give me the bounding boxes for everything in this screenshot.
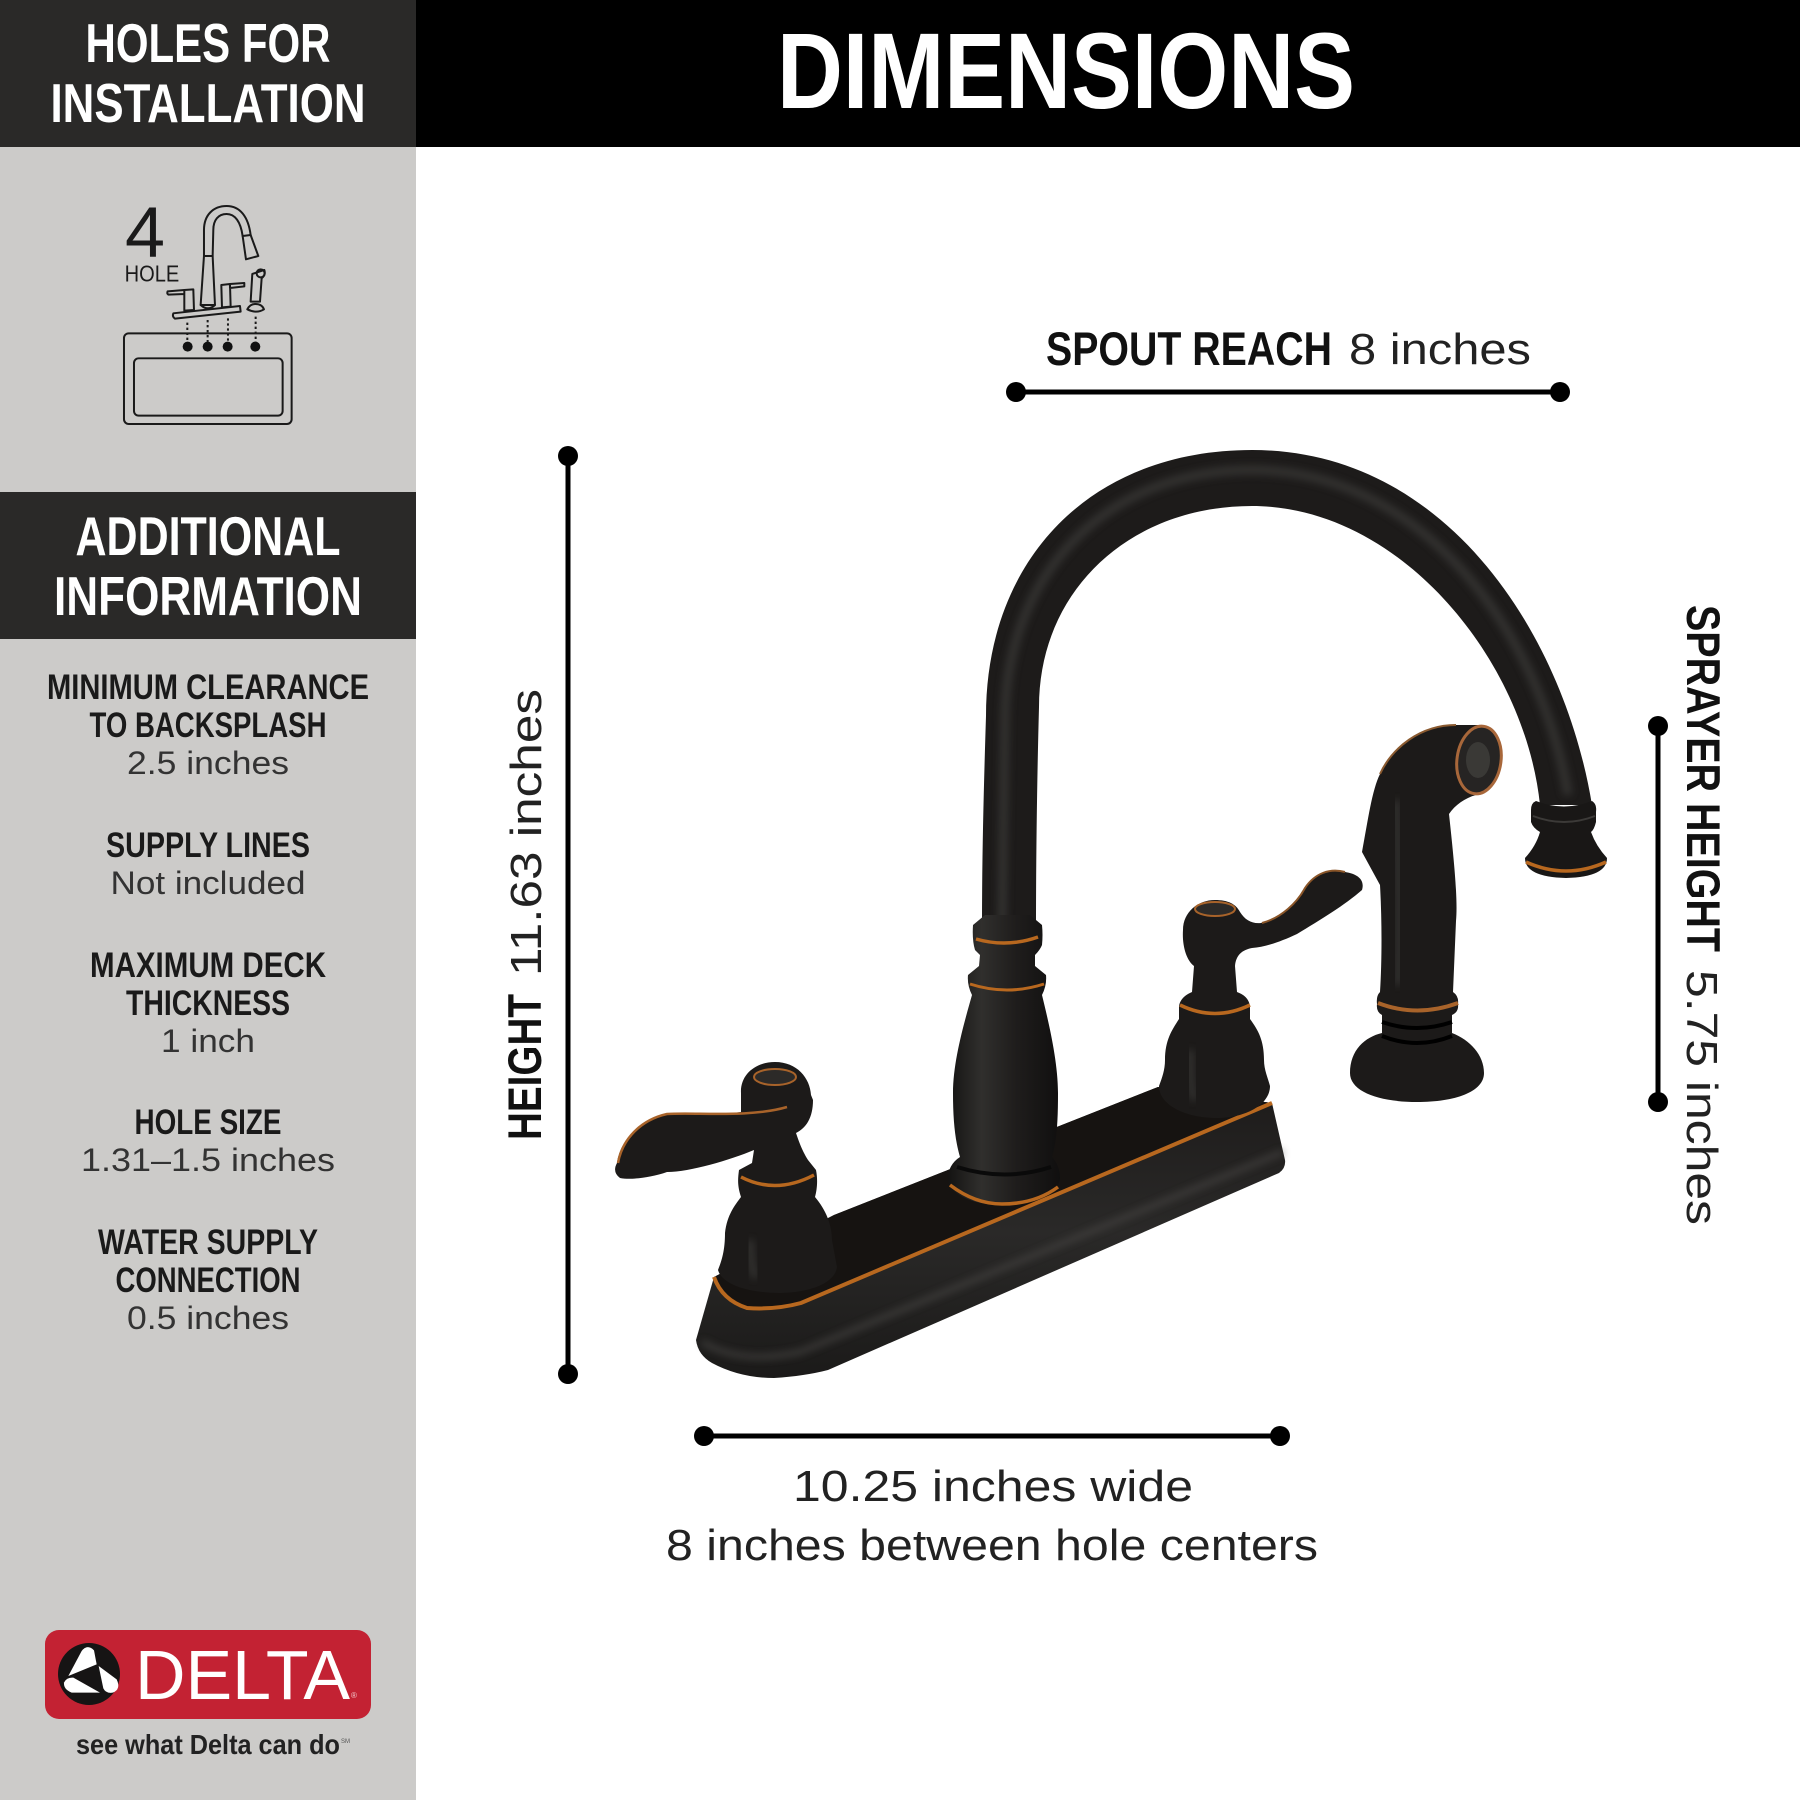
dimension: height: HEIGHT: [498, 994, 551, 1140]
text block: hole size: [81, 1103, 335, 1178]
dimension: sprayer height: 5.75 inches: [1677, 970, 1726, 1225]
spout: [982, 450, 1592, 925]
heading: additional information: ADDITIONAL: [76, 505, 340, 567]
dimension: sprayer height: [1648, 605, 1730, 1225]
spout tip: [1525, 801, 1607, 878]
dimension: sprayer height: SPRAYER HEIGHT: [1677, 605, 1730, 952]
text block: supply lines: [106, 826, 310, 901]
logo: delta: see what Delta can do: [76, 1729, 340, 1760]
heading: additional information: INFORMATION: [54, 565, 362, 627]
text block: water supply connection: WATER SUPPLY: [98, 1223, 318, 1262]
left handle: [615, 1062, 837, 1293]
text block: minimum clearance: MINIMUM CLEARANCE: [47, 668, 369, 707]
heading: additional information: [0, 492, 416, 639]
dimension: height: [498, 446, 578, 1384]
text block: water supply connection: CONNECTION: [116, 1261, 300, 1300]
logo: delta: DELTA: [135, 1636, 350, 1714]
text block: water supply connection: 0.5 inches: [127, 1300, 289, 1336]
deck plate: [696, 1087, 1285, 1378]
logo: delta: [45, 1630, 371, 1760]
icon: 4 hole sink and faucet: HOLE: [125, 261, 179, 287]
sprayer: [1350, 723, 1506, 1102]
center body: [948, 915, 1060, 1205]
text block: maximum deck thickness: [90, 946, 326, 1059]
icon: 4 hole sink and faucet: [124, 193, 292, 424]
heading: holes for installation: [0, 0, 416, 147]
dimension: width: 8 inches between hole centers: [666, 1521, 1318, 1570]
text block: hole size: HOLE SIZE: [134, 1103, 282, 1142]
faucet product image: [615, 450, 1607, 1378]
text block: supply lines: SUPPLY LINES: [106, 826, 310, 865]
text block: minimum clearance: [47, 668, 369, 781]
text block: maximum deck thickness: MAXIMUM DECK: [90, 946, 326, 985]
dimension: spout reach: [1006, 322, 1570, 402]
logo: delta: ®: [351, 1691, 357, 1700]
dimension: width: [666, 1426, 1318, 1570]
text block: hole size: 1.31–1.5 inches: [81, 1142, 335, 1178]
text block: maximum deck thickness: THICKNESS: [126, 984, 290, 1023]
heading: holes for installation: INSTALLATION: [50, 72, 366, 134]
text block: water supply connection: [98, 1223, 318, 1336]
title band: dimensions: DIMENSIONS: [777, 10, 1355, 131]
panel: sidebar: [0, 0, 416, 1800]
icon: 4 hole sink and faucet: 4: [125, 193, 165, 273]
right handle: [1159, 871, 1363, 1118]
text block: supply lines: Not included: [110, 865, 306, 901]
dimension: height: 11.63 inches: [502, 689, 551, 976]
logo: delta: SM: [341, 1739, 350, 1745]
dimension: spout reach: SPOUT REACH: [1046, 322, 1332, 375]
dimension: width: 10.25 inches wide: [793, 1462, 1193, 1511]
text block: maximum deck thickness: 1 inch: [161, 1023, 255, 1059]
text block: minimum clearance: TO BACKSPLASH: [90, 706, 326, 745]
heading: holes for installation: HOLES FOR: [86, 12, 330, 74]
text block: minimum clearance: 2.5 inches: [127, 745, 289, 781]
dimension: spout reach: 8 inches: [1349, 325, 1531, 374]
title band: dimensions: [416, 0, 1800, 147]
